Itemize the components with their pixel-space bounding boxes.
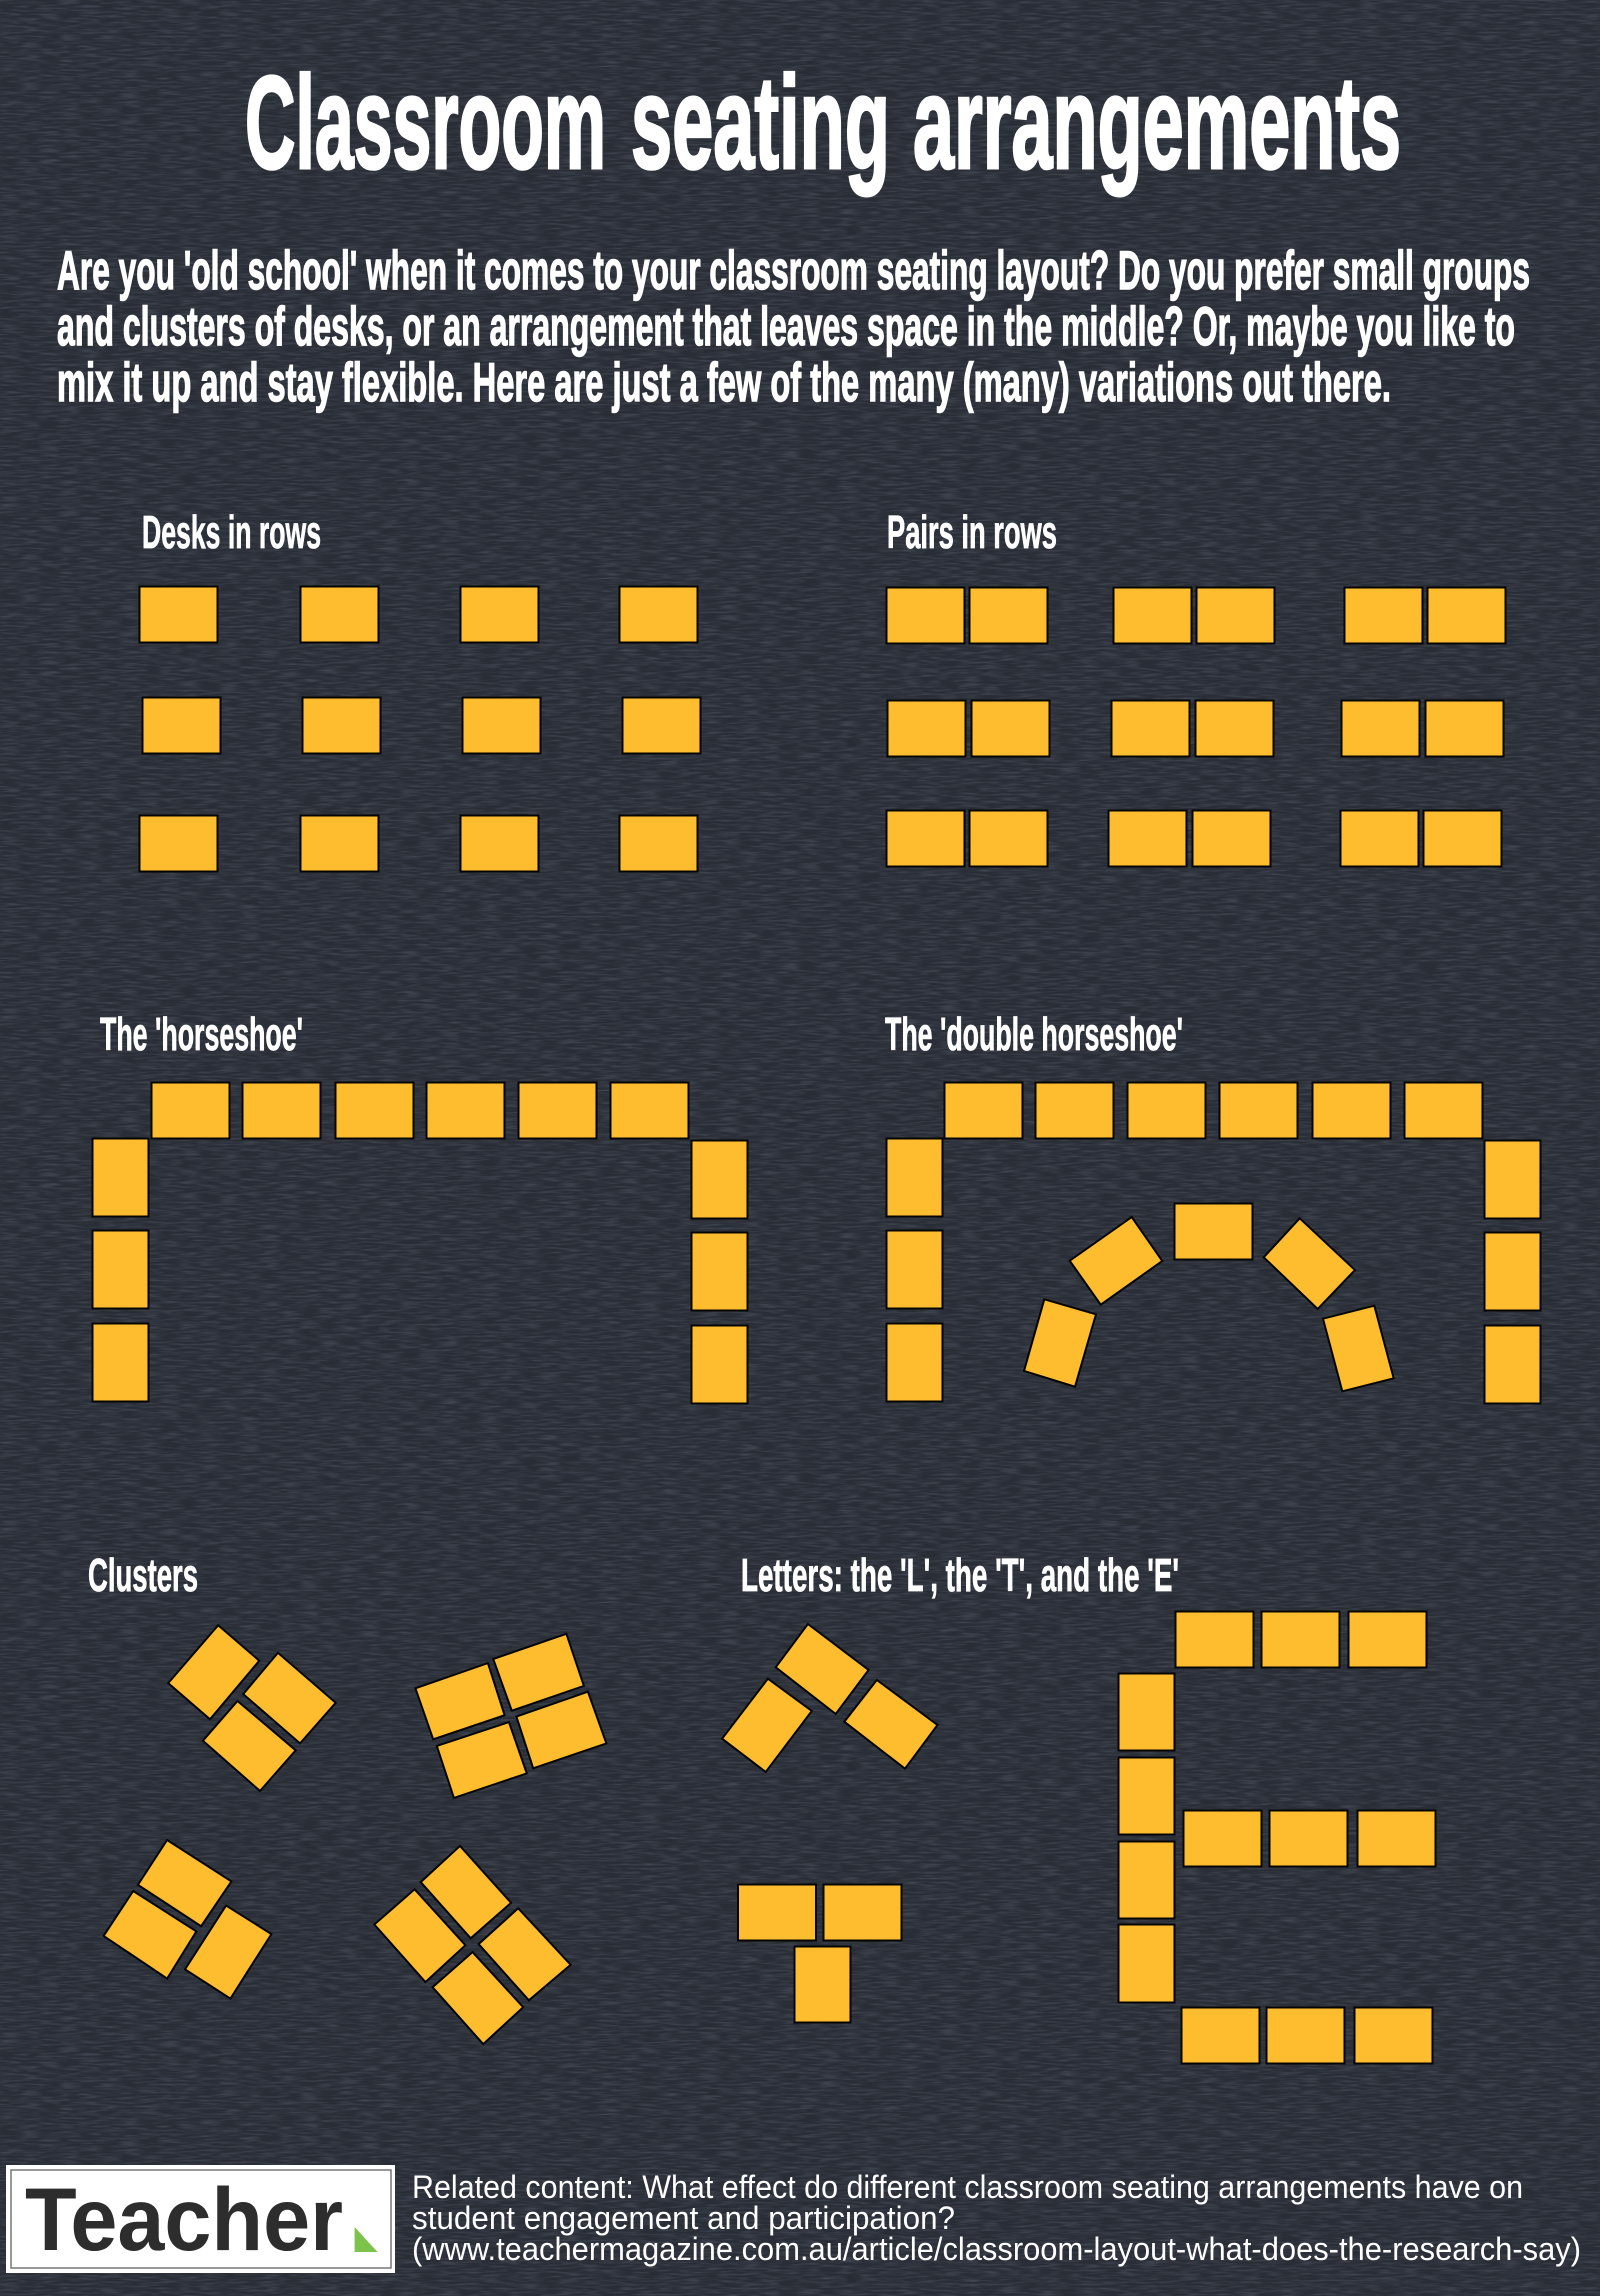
desks layout: nine pairs of desks — [886, 588, 1506, 866]
panel: pairs in rows — [886, 506, 1506, 866]
cluster: three desks bottom left — [104, 1840, 271, 1999]
panel: letters — [722, 1549, 1436, 2064]
panel: desks in rows — [140, 506, 700, 872]
heading: desks in rows: Desks in rows — [142, 506, 321, 558]
related content text: student engagement and participation? — [412, 2200, 955, 2236]
desks layout: letter E — [1118, 1612, 1436, 2064]
panel: clusters — [88, 1549, 606, 2044]
heading: letters: Letters: the 'L', the 'T', and the 'E' — [741, 1549, 1179, 1601]
logo: Teacher: Teacher — [25, 2169, 343, 2269]
title: seating — [631, 49, 890, 196]
desks layout: outer horseshoe — [886, 1082, 1540, 1404]
desks layout: twelve single desks — [140, 586, 700, 872]
cluster: three desks top left — [168, 1625, 336, 1791]
desks layout: letter L — [722, 1624, 938, 1772]
heading: the double horseshoe: The 'double horseshoe' — [885, 1008, 1183, 1060]
cluster: four desks bottom right — [374, 1846, 571, 2044]
desks layout: horseshoe — [92, 1082, 748, 1404]
panel: the double horseshoe — [885, 1008, 1540, 1404]
desks layout: letter T — [738, 1884, 902, 2022]
cluster: four desks top right — [415, 1634, 606, 1798]
panel: the horseshoe — [92, 1008, 748, 1404]
title: Classroom — [245, 49, 606, 196]
title — [245, 49, 1401, 196]
intro text block — [57, 239, 1530, 413]
desks layout: inner arc — [1024, 1204, 1394, 1391]
related content text: Related content: What effect do different classroom seating arrangements have on — [412, 2169, 1523, 2205]
heading: the horseshoe: The 'horseshoe' — [100, 1008, 303, 1060]
related content text: (www.teachermagazine.com.au/article/classroom-layout-what-does-the-research-say) — [412, 2231, 1581, 2267]
heading: clusters: Clusters — [88, 1549, 198, 1601]
related content text — [412, 2169, 1581, 2267]
heading: pairs in rows: Pairs in rows — [887, 506, 1057, 558]
